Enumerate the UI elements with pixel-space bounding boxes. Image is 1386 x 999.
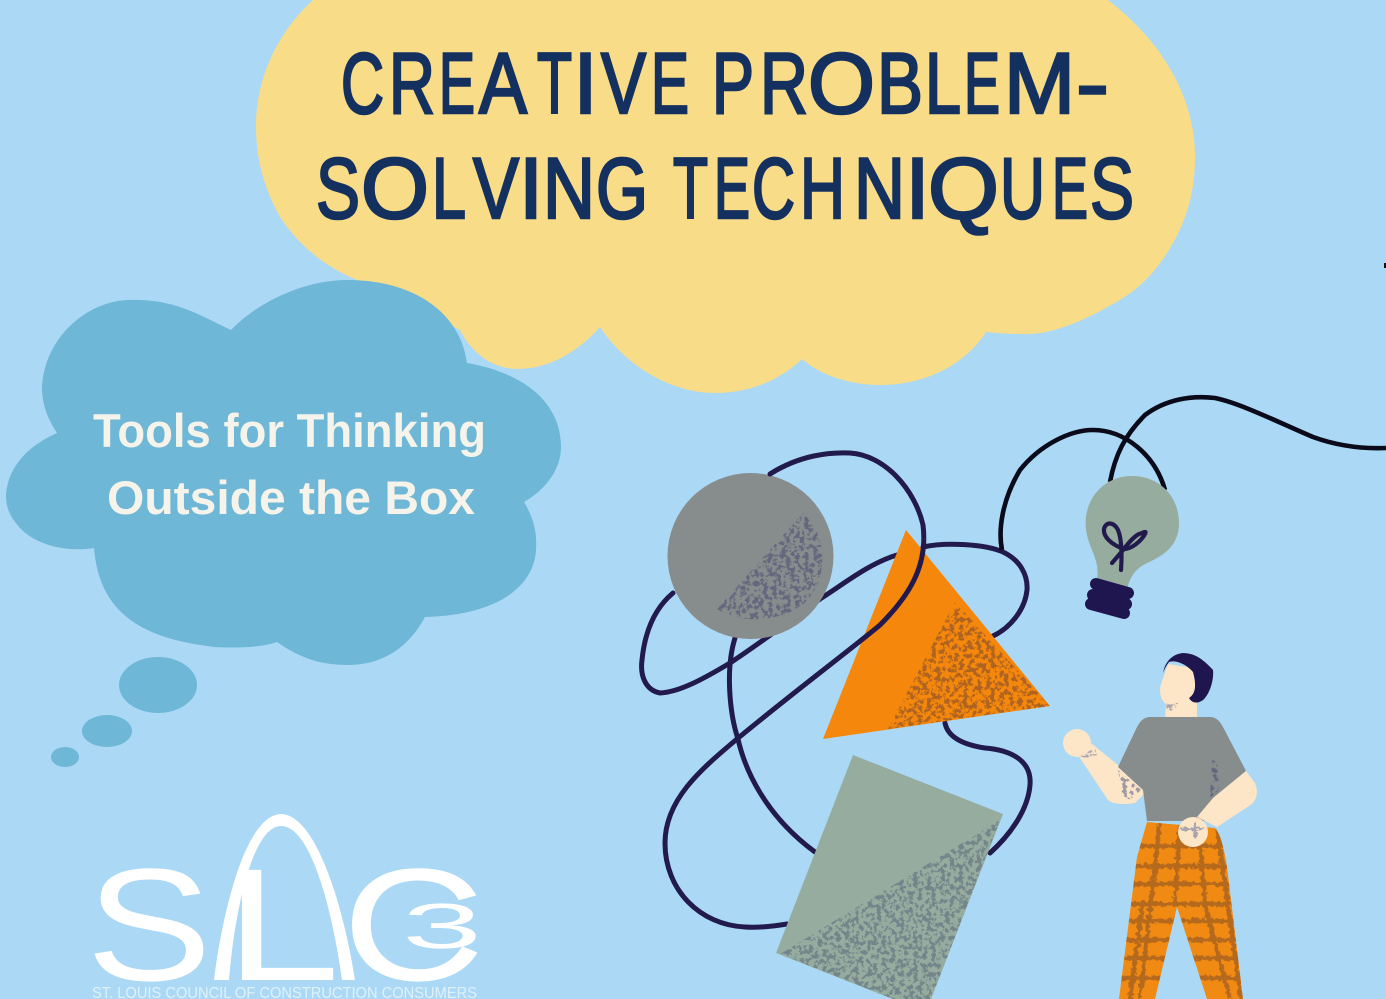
title: T: [673, 141, 708, 237]
rectangle shape: [776, 755, 1003, 999]
title: E: [651, 36, 689, 132]
hair: [1163, 653, 1213, 703]
neck tattoo: [1166, 703, 1178, 711]
rectangle texture: [780, 820, 1000, 999]
circle texture: [717, 513, 822, 619]
title: N: [543, 141, 595, 237]
title: I: [906, 141, 930, 237]
title: I: [574, 36, 598, 132]
arch: [214, 814, 355, 980]
head and neck: [1160, 664, 1197, 720]
title: B: [877, 36, 923, 132]
title: N: [854, 141, 905, 237]
cloud shape: [6, 280, 561, 665]
hand right: [1178, 817, 1208, 847]
title: O: [361, 141, 429, 237]
person: [1063, 653, 1257, 999]
title: E: [439, 36, 475, 132]
title: E: [964, 36, 1000, 132]
filament: [1104, 523, 1146, 570]
light bulb: [1086, 476, 1179, 613]
right arm: [1197, 771, 1257, 827]
circle shape: [668, 473, 834, 639]
title: E: [714, 141, 750, 237]
title: L: [925, 36, 961, 132]
thought bubbles: [51, 657, 197, 767]
title: R: [389, 36, 435, 132]
arm tattoo: [1118, 770, 1141, 800]
title: V: [601, 36, 646, 132]
tangled lines behind shapes: [642, 544, 1030, 853]
title: G: [596, 141, 648, 237]
triangle shape: [823, 530, 1050, 739]
title: C: [341, 36, 384, 132]
title: R: [760, 36, 808, 132]
main loop line over triangle: [665, 453, 924, 927]
title: C: [752, 141, 795, 237]
wrist tattoo: [1080, 748, 1097, 758]
edge speck: [1384, 263, 1386, 268]
title: V: [473, 141, 519, 237]
title: O: [808, 36, 875, 132]
numeral three: 3: [402, 890, 482, 962]
title: [316, 36, 1134, 237]
shirt texture: [1210, 760, 1219, 798]
title: U: [1000, 141, 1045, 237]
pants check pattern: [1114, 822, 1245, 999]
title: S: [316, 141, 360, 237]
title: P: [712, 36, 754, 132]
title: H: [800, 141, 845, 237]
title: M: [1004, 36, 1075, 132]
pants: [1119, 822, 1243, 999]
black wires: [1001, 397, 1386, 550]
subtitle text: Tools for Thinking: [93, 404, 486, 457]
triangle texture: [888, 602, 1050, 729]
hand tattoo: [1180, 822, 1205, 838]
subtitle text: [93, 404, 486, 524]
title: -: [1076, 36, 1109, 132]
logo letters: [86, 835, 485, 999]
title: L: [432, 141, 466, 237]
title: I: [519, 141, 543, 237]
title: S: [1090, 141, 1134, 237]
hand left: [1063, 729, 1091, 757]
title: Q: [928, 141, 999, 237]
title cloud: [256, 0, 1195, 393]
subtitle text: Outside the Box: [107, 471, 475, 524]
title: A: [479, 36, 528, 132]
shirt: [1118, 717, 1246, 821]
bulb base: [1091, 584, 1128, 613]
left forearm: [1076, 744, 1146, 804]
bulb glass: [1086, 476, 1179, 590]
title: E: [1052, 141, 1088, 237]
title: T: [537, 36, 572, 132]
thought cloud: subtitle: [6, 280, 561, 665]
logo: SLC3: [86, 814, 485, 999]
